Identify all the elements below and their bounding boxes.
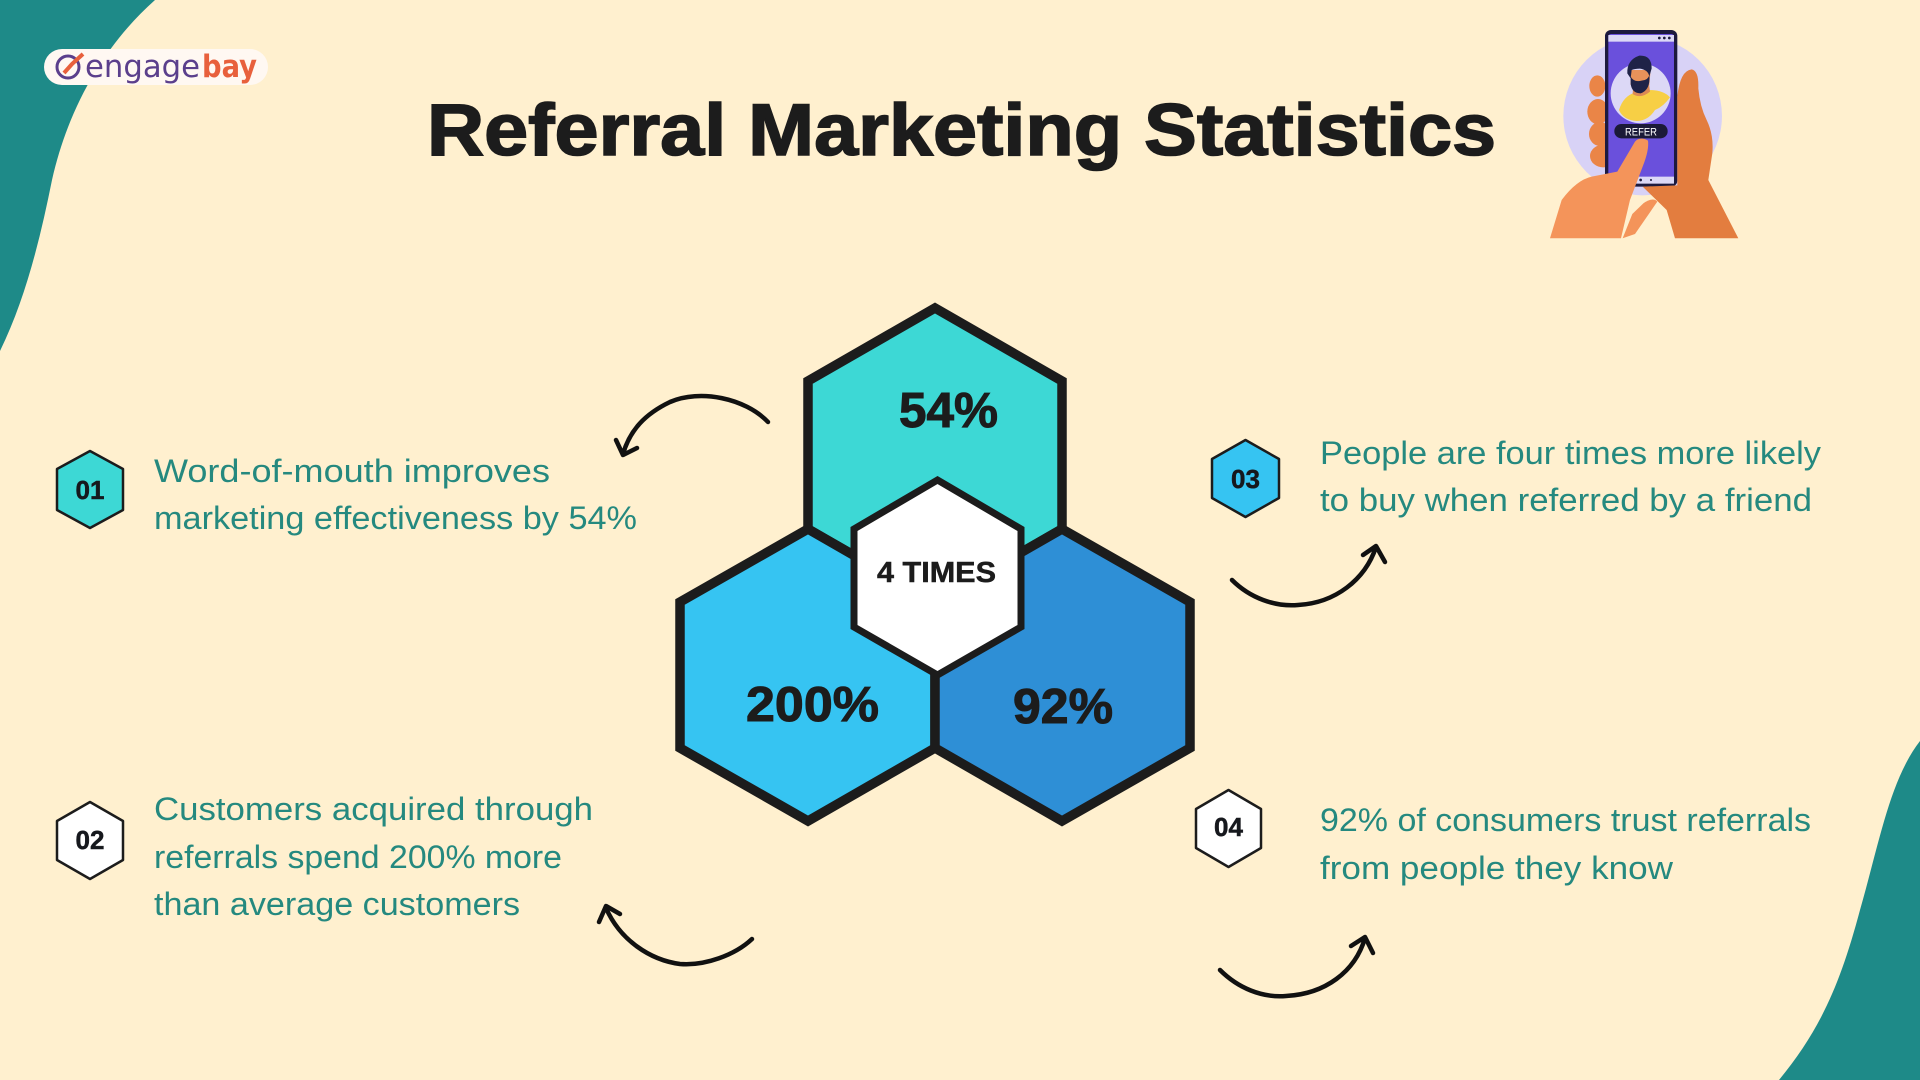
text 04: from people they know: [1320, 850, 1674, 886]
left hand fingers behind phone: [1587, 75, 1617, 167]
teal corner blob: top left: [0, 0, 155, 351]
text 03: to buy when referred by a friend: [1320, 482, 1812, 518]
item 02: [57, 791, 593, 922]
front thumb: [1623, 200, 1657, 238]
right hand: [1643, 69, 1738, 238]
text 01: Word-of-mouth improves: [154, 453, 550, 489]
refer button: REFER: [1625, 126, 1657, 138]
avatar: [1611, 56, 1671, 123]
hexagon: 92%: [935, 529, 1190, 821]
hexagon: 54%: [808, 308, 1062, 602]
text 04: 92% of consumers trust referrals: [1320, 802, 1811, 838]
illustration: hands holding phone with refer button: [1550, 30, 1738, 238]
logo wordmark: engage: engage: [85, 49, 200, 85]
badge 04: [1196, 790, 1261, 867]
text 01: marketing effectiveness by 54%: [154, 500, 637, 536]
hexagon: 92%: 92%: [1013, 680, 1113, 734]
text 02: than average customers: [154, 886, 520, 922]
arrow 03: [1232, 546, 1385, 605]
refer button: [1614, 124, 1668, 138]
badge 04: 04: [1214, 812, 1243, 842]
hexagon: 54%: 54%: [899, 384, 998, 438]
hexagon: 200%: 200%: [746, 678, 879, 732]
badge 03: 03: [1231, 464, 1260, 494]
logo: engagebay: [44, 49, 268, 85]
hexagon: 200%: [680, 529, 935, 821]
badge 01: 01: [76, 475, 104, 505]
hexagon diagram: [680, 308, 1190, 821]
text 03: People are four times more likely: [1320, 435, 1821, 471]
arrow 04: [1220, 937, 1373, 996]
phone: [1605, 30, 1677, 187]
hexagon: 4 times: [854, 480, 1021, 675]
title: Referral Marketing Statistics: [427, 90, 1496, 171]
text 02: referrals spend 200% more: [154, 839, 562, 875]
teal corner blob: bottom right: [1779, 741, 1920, 1080]
logo icon: [57, 54, 83, 78]
hexagon: 4 times: 4 TIMES: [877, 557, 996, 589]
badge 02: 02: [76, 825, 104, 855]
badge 01: [57, 451, 123, 528]
arrow 02: [599, 906, 752, 964]
text 02: Customers acquired through: [154, 791, 593, 827]
item 03: [1212, 435, 1821, 518]
item 04: [1196, 790, 1811, 886]
front hand: [1550, 139, 1648, 238]
arrow 01: [616, 396, 768, 455]
item 01: [57, 451, 637, 536]
badge 02: [57, 802, 123, 879]
logo wordmark: bay: bay: [202, 49, 257, 85]
badge 03: [1212, 440, 1279, 517]
